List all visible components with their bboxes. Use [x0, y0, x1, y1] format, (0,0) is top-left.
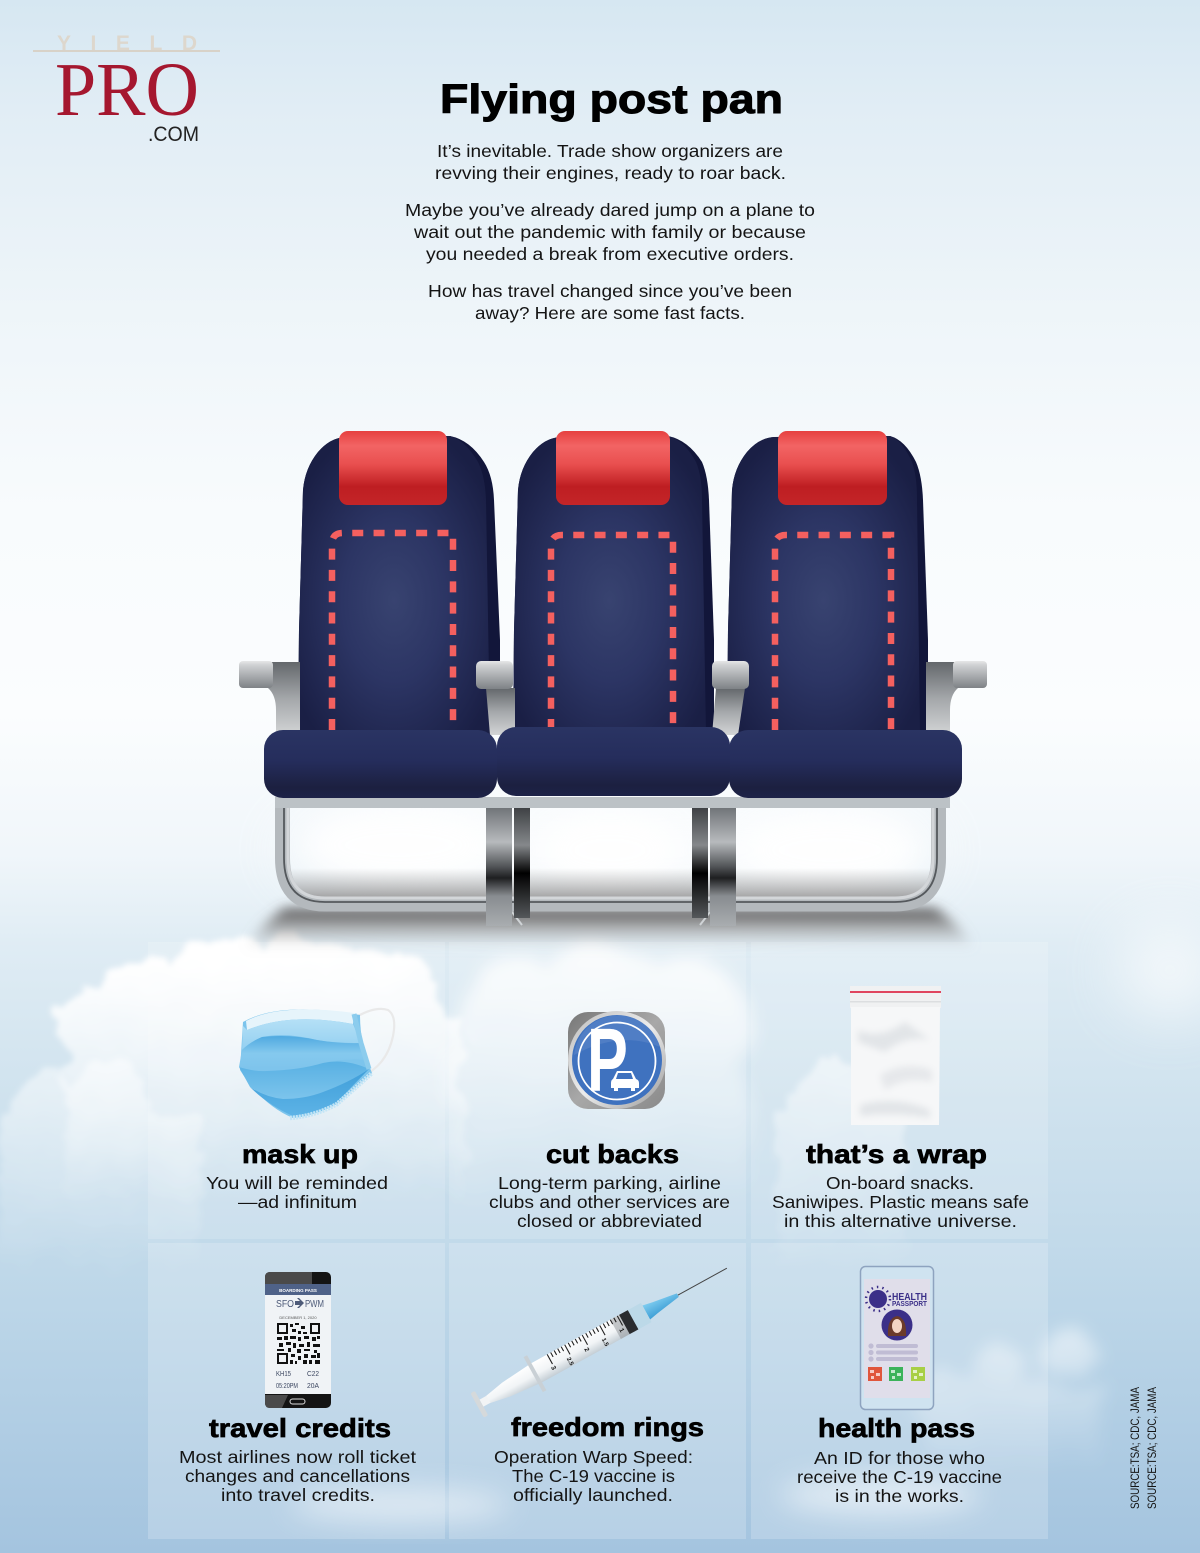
body text: The C-19 vaccine is	[512, 1466, 675, 1486]
panel: that's a wrap	[751, 942, 1048, 1239]
seat cushions	[264, 727, 962, 798]
seat back 1	[298, 431, 500, 735]
icon: syringe: 2	[582, 1347, 590, 1353]
seat frame	[275, 797, 950, 926]
icon: phone boarding pass: SFO	[276, 1299, 294, 1310]
body text	[179, 1447, 416, 1505]
heading: cut backs	[546, 1139, 679, 1169]
intro text: away? Here are some fast facts.	[475, 303, 745, 323]
body text: closed or abbreviated	[517, 1211, 702, 1231]
logo: Yield Pro: YIELD	[57, 32, 197, 55]
intro text: Maybe you’ve already dared jump on a plane to	[405, 200, 815, 220]
icon: phone boarding pass: C22	[307, 1371, 319, 1378]
body text: Operation Warp Speed:	[494, 1447, 693, 1467]
body text	[772, 1173, 1029, 1231]
icon: health passport phone: HEALTH	[892, 1292, 927, 1303]
body text	[797, 1448, 1002, 1506]
intro text: revving their engines, ready to roar back.	[435, 163, 786, 183]
panel: health pass	[751, 1243, 1048, 1539]
source credit	[1128, 1387, 1159, 1509]
logo: Yield Pro	[33, 32, 220, 146]
icon: phone boarding pass: 05:20PM	[276, 1383, 298, 1390]
icon: phone boarding pass	[265, 1272, 331, 1408]
icon: syringe: 3	[549, 1365, 557, 1372]
heading: mask up	[242, 1139, 358, 1169]
body text: —ad infinitum	[238, 1192, 357, 1212]
source credit: SOURCE:TSA; CDC, JAMA	[1145, 1387, 1159, 1509]
heading: travel credits	[209, 1413, 391, 1443]
illustration: three airplane seats	[239, 431, 987, 948]
armrests	[239, 661, 987, 735]
intro text: you needed a break from executive orders.	[426, 244, 794, 264]
body text: Most airlines now roll ticket	[179, 1447, 416, 1467]
panel: cut backs	[449, 942, 746, 1239]
body text	[494, 1447, 693, 1505]
body text: Saniwipes. Plastic means safe	[772, 1192, 1029, 1212]
heading: that’s a wrap	[806, 1139, 987, 1169]
title: Flying post pan	[440, 76, 783, 122]
body text: in this alternative universe.	[784, 1211, 1017, 1231]
icon: syringe: 2.5	[565, 1357, 574, 1367]
panel: freedom rings	[449, 1243, 746, 1539]
icon: phone boarding pass: BOARDING PASS	[279, 1288, 317, 1293]
body text: changes and cancellations	[185, 1466, 410, 1486]
icon: parking sign: P	[587, 1010, 628, 1111]
icon: health passport phone	[860, 1266, 934, 1410]
icon: parking sign	[568, 1010, 666, 1111]
intro text: wait out the pandemic with family or because	[413, 222, 806, 242]
seat back 3	[727, 431, 928, 735]
body text: An ID for those who	[814, 1448, 985, 1468]
panel: mask up	[148, 942, 445, 1239]
floor shadow	[245, 908, 975, 948]
icon: syringe	[467, 1251, 737, 1423]
logo: Yield Pro: .COM	[148, 123, 199, 146]
icon: phone boarding pass: KH15	[276, 1371, 291, 1378]
body text	[206, 1173, 388, 1212]
icon: plastic bag	[850, 986, 941, 1125]
panel: travel credits	[148, 1243, 445, 1539]
icon: phone boarding pass: 20A	[307, 1383, 319, 1390]
heading: health pass	[818, 1413, 975, 1443]
logo: Yield Pro: PRO	[55, 48, 199, 132]
icon: face mask	[239, 1009, 394, 1118]
body text: officially launched.	[513, 1485, 673, 1505]
body text	[489, 1173, 730, 1231]
body text: into travel credits.	[221, 1485, 375, 1505]
body text: On-board snacks.	[826, 1173, 974, 1193]
body text: You will be reminded	[206, 1173, 388, 1193]
icon: health passport phone: PASSPORT	[892, 1301, 928, 1308]
body text: receive the C-19 vaccine	[797, 1467, 1002, 1487]
body text: Long-term parking, airline	[498, 1173, 721, 1193]
body text: clubs and other services are	[489, 1192, 730, 1212]
heading: freedom rings	[511, 1412, 704, 1442]
intro text: How has travel changed since you’ve been	[428, 281, 792, 301]
seat back 2	[513, 431, 714, 735]
icon: syringe: 1	[617, 1327, 625, 1334]
icon: phone boarding pass: DECEMBER 1, 2020	[279, 1315, 317, 1320]
icon: syringe: 1.5	[600, 1337, 609, 1348]
source credit: SOURCE:TSA; CDC, JAMA	[1128, 1387, 1142, 1509]
icon: phone boarding pass: PWM	[305, 1299, 324, 1310]
body text: is in the works.	[835, 1486, 964, 1506]
intro text: It’s inevitable. Trade show organizers are	[437, 141, 783, 161]
intro text	[405, 141, 815, 323]
